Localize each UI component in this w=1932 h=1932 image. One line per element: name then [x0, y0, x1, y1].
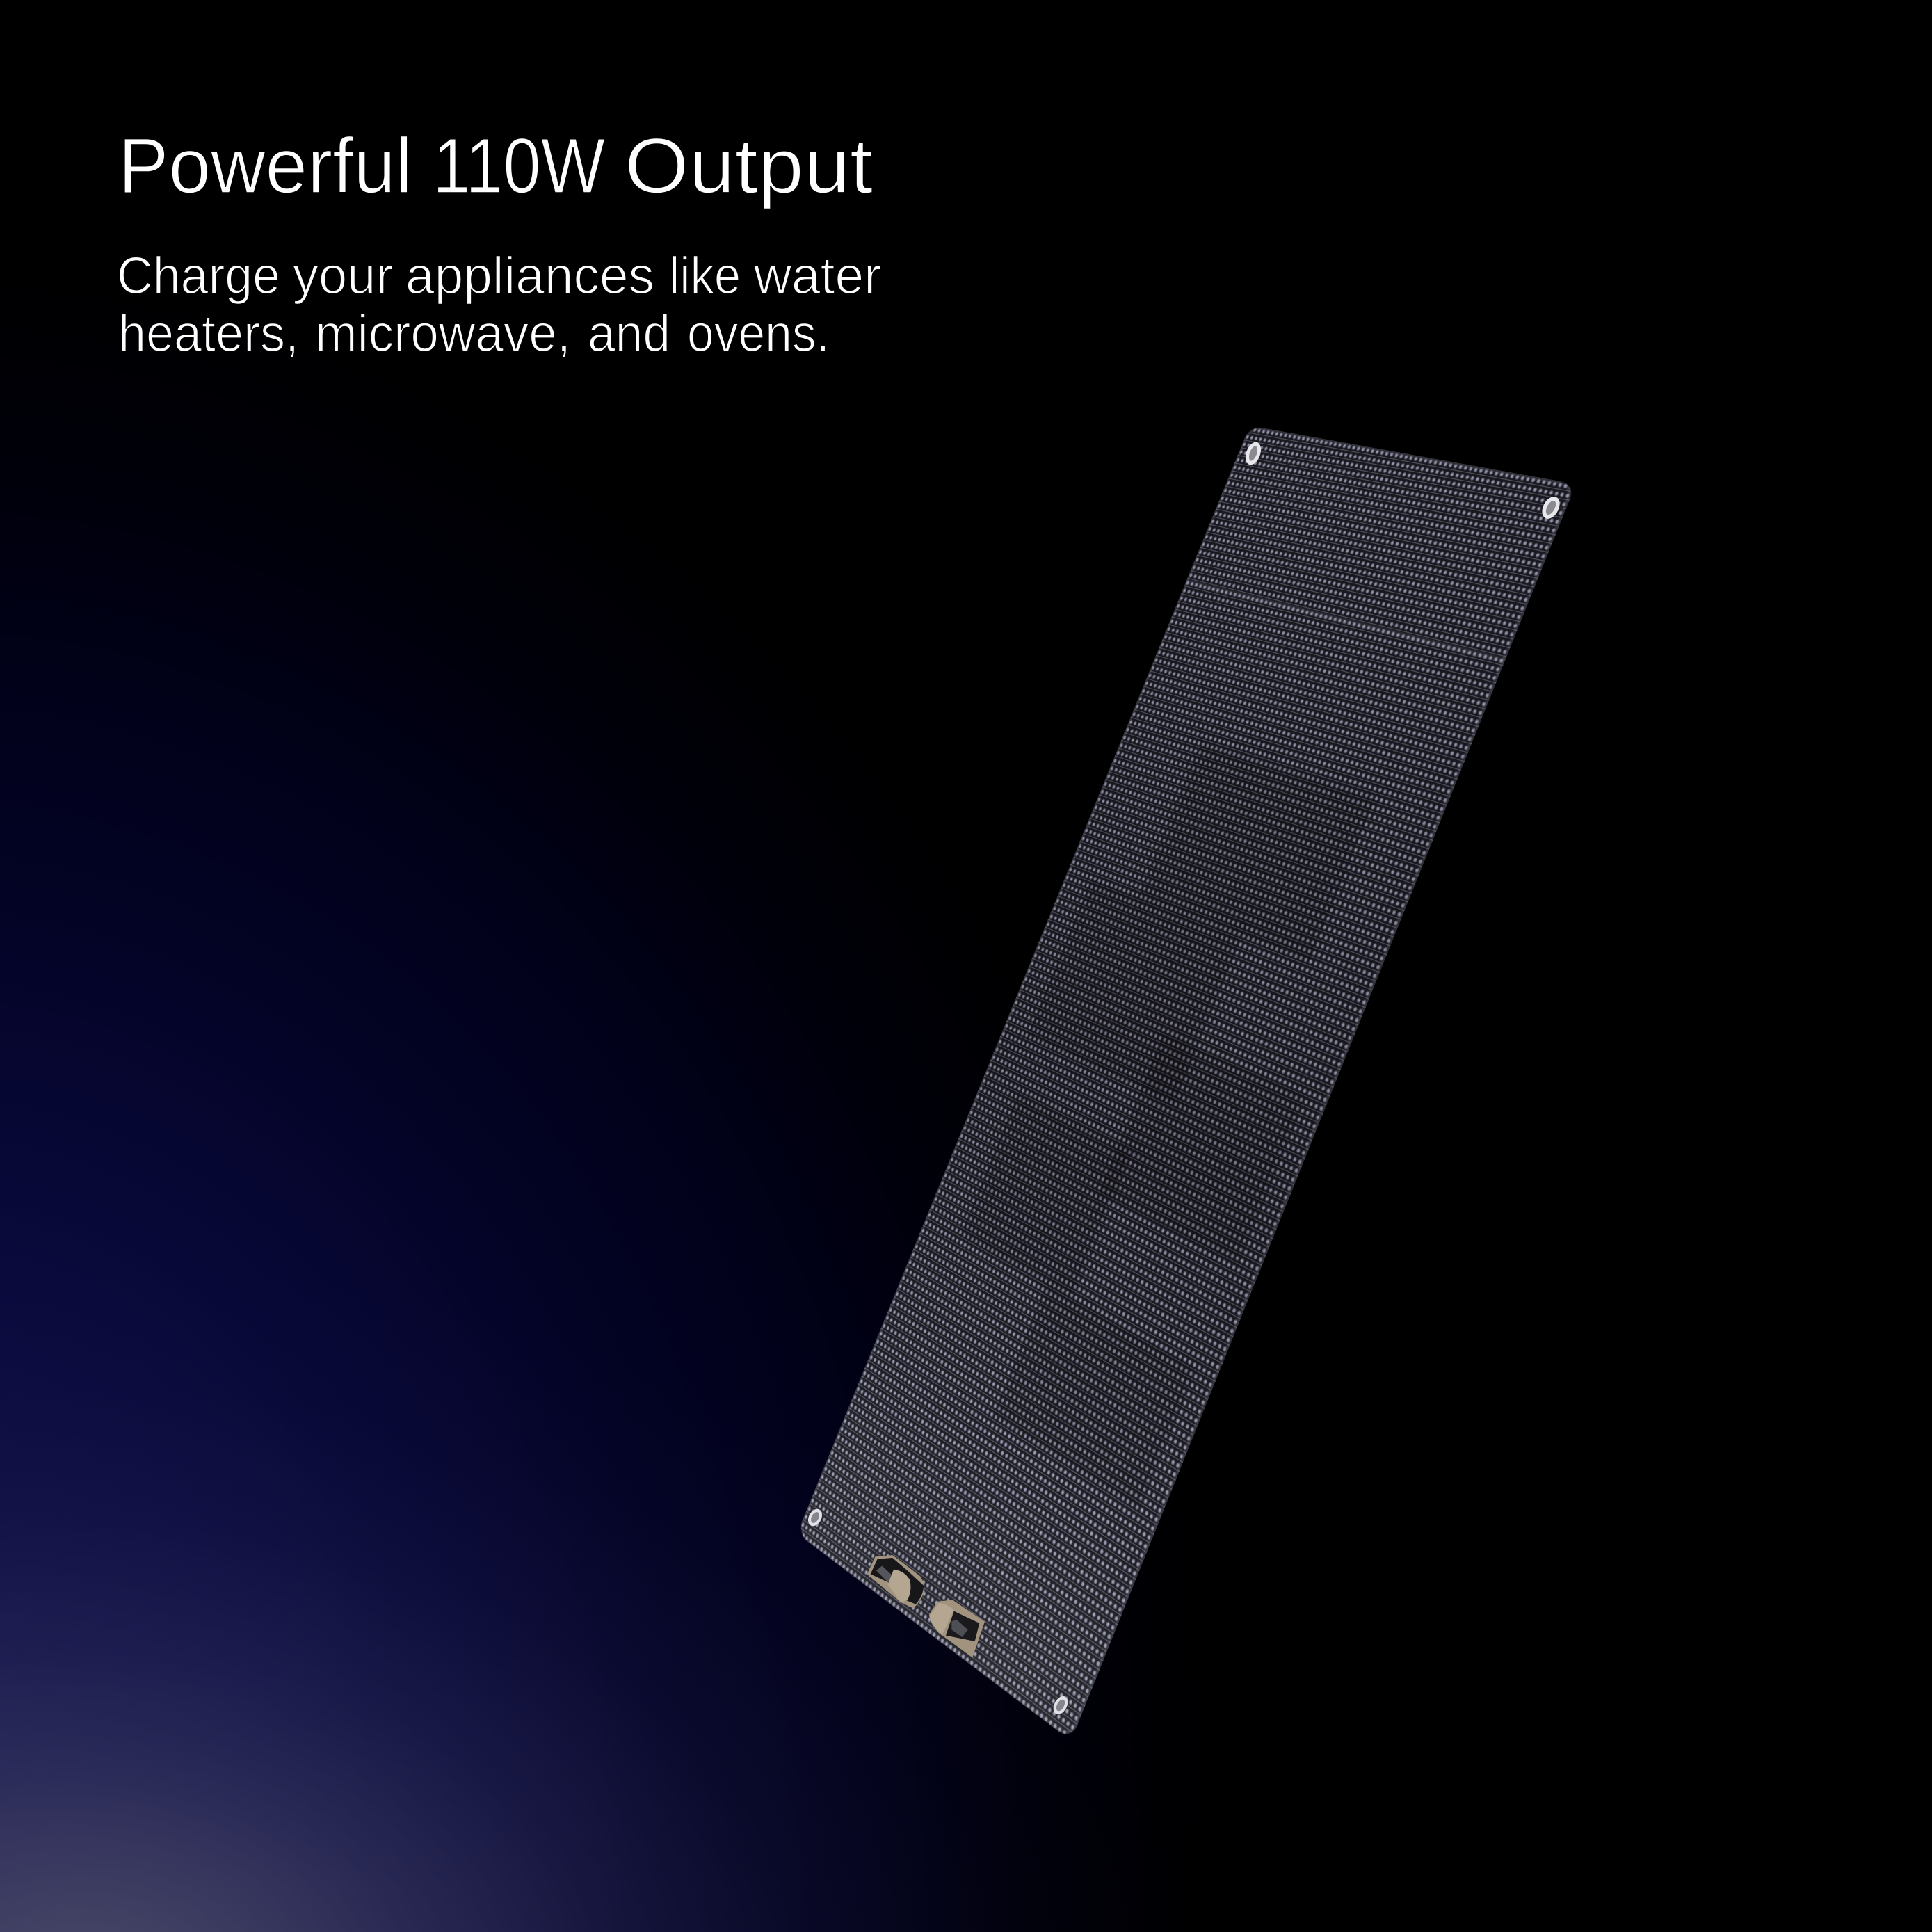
text block: heading and description — [117, 122, 881, 362]
heading: 110W — [433, 122, 605, 209]
heading: Output — [625, 122, 873, 209]
icon: grommet bottom left — [805, 1506, 825, 1529]
icon: grommet bottom right — [1050, 1693, 1071, 1717]
connector: left junction — [867, 1555, 924, 1609]
description: like — [669, 246, 741, 305]
connector: right junction — [929, 1600, 985, 1657]
description: heaters, — [118, 304, 299, 362]
description: microwave, — [315, 304, 571, 362]
panel: solar panel surface — [797, 426, 1576, 1741]
description: appliances — [405, 246, 654, 305]
heading — [118, 122, 873, 209]
description — [117, 246, 881, 362]
heading: Powerful — [118, 122, 412, 209]
description: Charge — [117, 246, 280, 305]
description: your — [293, 246, 393, 305]
description: ovens. — [687, 304, 830, 362]
description: water — [753, 246, 881, 305]
description: and — [588, 304, 670, 362]
icon: grommet top right — [1538, 494, 1563, 522]
icon: grommet top left — [1243, 440, 1264, 467]
